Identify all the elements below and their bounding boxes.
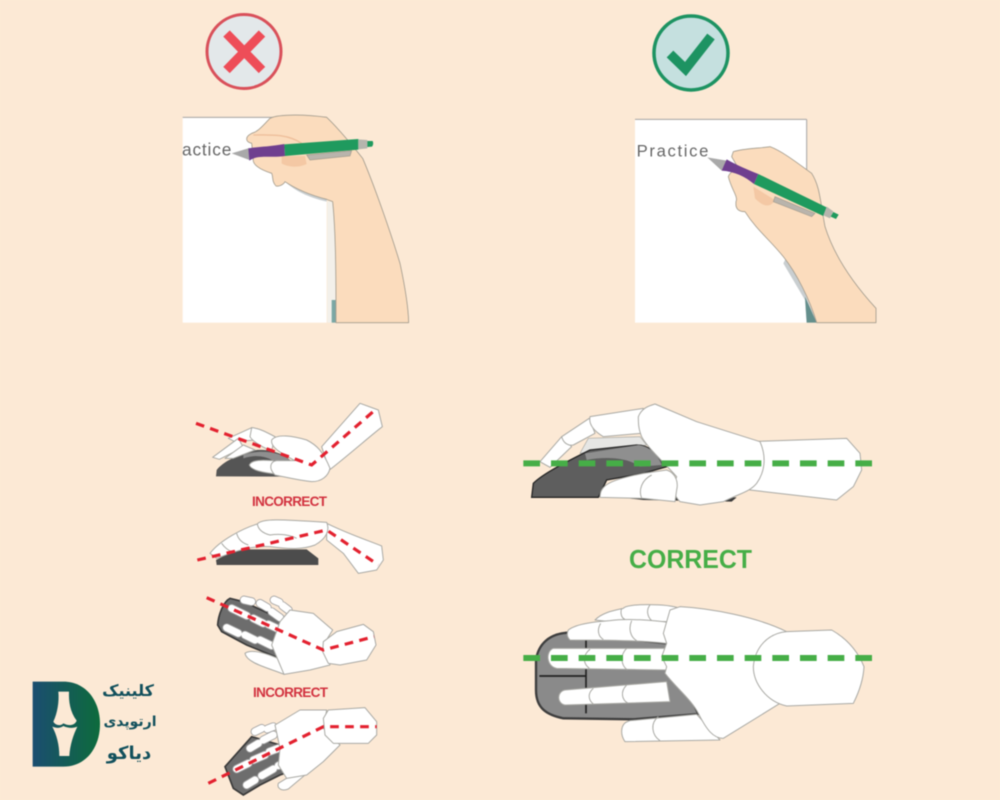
logo: clinic mark [33,682,100,767]
flat hand [210,520,328,558]
posture line [523,454,875,472]
knee bones [52,692,77,756]
figure: correct top view [523,605,875,742]
forearm [750,438,862,500]
fingers lower [237,727,308,790]
forearm [323,624,376,665]
panel: correct writing posture [635,119,876,323]
forearm lowered [327,523,383,573]
fingers [213,428,283,475]
logo: clinic name [102,681,157,764]
icon: correct check [654,16,728,90]
fingers [548,605,720,742]
handwriting sample: Practice [637,142,708,161]
icon: incorrect cross [207,14,281,88]
posture line [208,727,377,783]
pen [707,157,839,219]
pen [232,139,373,161]
posture line [197,530,378,565]
thumb [600,470,677,502]
figure: incorrect wrist extended and flexed (side views) [196,403,383,573]
forearm lower [323,708,377,743]
label: correct: CORRECT [629,544,752,574]
hand and forearm [247,115,409,323]
label: incorrect: INCORRECT [252,494,328,509]
figure: correct side view [523,404,875,505]
palm [271,436,330,482]
figure: incorrect wrist deviation (top views) [207,598,377,795]
mouse [216,450,293,477]
paper [183,117,327,323]
forearm raised [322,403,382,470]
logo: clinic name: ارتوپدی [103,714,157,730]
forearm [753,630,864,706]
mouse [532,445,737,502]
mouse [536,633,698,719]
mouse [218,598,287,660]
posture line [207,598,374,650]
paper [635,119,807,323]
fingers [227,600,288,674]
fingers back [540,418,647,467]
logo: clinic name: کلینیک [102,681,155,700]
logo: clinic name: دیاکو [106,743,151,764]
palm lower [275,710,340,778]
palm [662,607,787,738]
hand and forearm [728,147,876,323]
mouse pad [216,549,318,565]
panel: incorrect writing posture [182,115,409,323]
letter D [33,682,100,767]
palm [638,404,764,505]
posture line [523,649,875,667]
upper finger [590,408,643,437]
handwriting sample: actice [182,140,231,160]
mouse lower [225,737,308,795]
posture line [196,410,375,465]
palm [272,610,333,674]
label: incorrect: INCORRECT [253,685,329,700]
